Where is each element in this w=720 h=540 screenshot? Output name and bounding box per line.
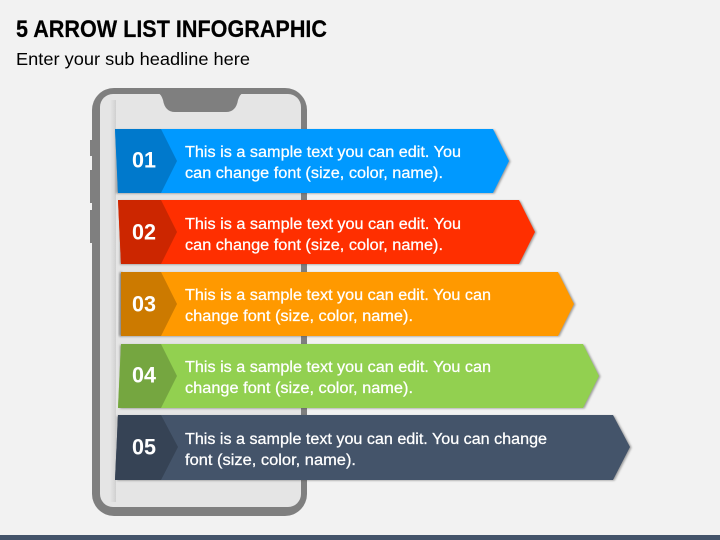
phone illustration: [90, 88, 307, 516]
arrow 3 number tab: [121, 272, 177, 336]
subtitle: Enter your sub headline here: [16, 49, 250, 69]
arrow 3 text: change font (size, color, name).: [185, 308, 413, 325]
bottom bar: [0, 535, 720, 540]
arrow 4 text: change font (size, color, name).: [185, 380, 413, 397]
arrow 3 body: [121, 272, 574, 336]
arrow 4 body: [118, 344, 599, 408]
arrow 1 text: This is a sample text you can edit. You: [185, 144, 461, 161]
arrow 2 number tab: [118, 200, 177, 264]
arrow 4: [118, 344, 600, 408]
arrow 1 text: can change font (size, color, name).: [185, 165, 443, 182]
arrow 1 body: [115, 129, 509, 193]
arrow 5: [115, 415, 632, 480]
arrow 2 body: [118, 200, 535, 264]
number 04: 04: [132, 362, 157, 388]
arrow 2 text: This is a sample text you can edit. You: [185, 216, 461, 233]
phone side buttons: [90, 140, 93, 243]
phone screen: [100, 94, 301, 507]
number 05: 05: [132, 434, 156, 460]
title: 5 ARROW LIST INFOGRAPHIC: [16, 16, 327, 43]
number 02: 02: [132, 220, 156, 244]
number 03: 03: [132, 292, 156, 316]
arrow 1: [115, 129, 510, 194]
phone notch: [158, 93, 243, 112]
phone body: [92, 88, 307, 516]
arrow 5 text: This is a sample text you can edit. You can change: [185, 431, 547, 448]
arrow 3 text: This is a sample text you can edit. You can: [185, 287, 491, 304]
arrow 3: [120, 272, 576, 336]
arrow 4 text: This is a sample text you can edit. You can: [185, 359, 491, 376]
arrow 4 number tab: [118, 344, 177, 408]
arrow 5 body: [115, 415, 630, 480]
arrow 5 text: font (size, color, name).: [185, 452, 356, 469]
arrow 1 number tab: [115, 129, 177, 193]
arrow 2 text: can change font (size, color, name).: [185, 237, 443, 254]
number 01: 01: [132, 148, 156, 172]
arrow 2: [118, 200, 536, 264]
arrow 5 number tab: [115, 415, 178, 480]
